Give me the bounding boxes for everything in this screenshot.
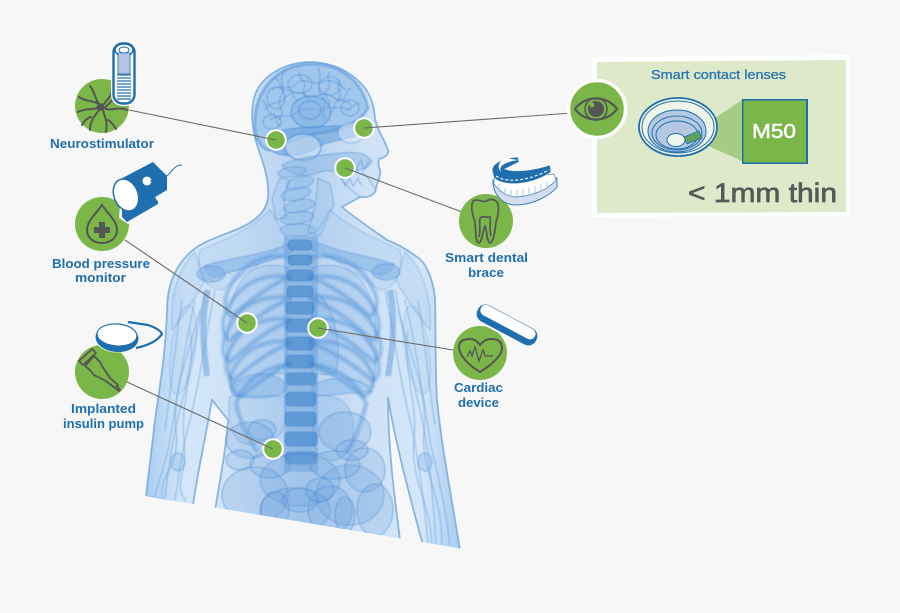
- dental brace illustration: [492, 157, 557, 205]
- device: smart dental brace: [445, 157, 557, 280]
- human body illustration: [146, 62, 460, 550]
- label: Cardiac: [454, 380, 503, 395]
- body silhouette: [146, 62, 460, 550]
- device: cardiac device: [453, 300, 542, 410]
- label: monitor: [75, 270, 126, 285]
- label: [63, 401, 144, 431]
- label: [52, 256, 150, 285]
- internal anatomy: [155, 64, 450, 546]
- panel title: Smart contact lenses: [651, 68, 786, 82]
- device: neurostimulator: [50, 42, 154, 151]
- icon: blood drop: [75, 197, 129, 251]
- icon: heart: [453, 326, 507, 380]
- pin: neurostimulator: [266, 130, 286, 150]
- M50 chip: [742, 99, 808, 164]
- neck spine: [272, 165, 334, 236]
- ribs: [223, 256, 381, 452]
- label: Smart dental: [445, 250, 528, 265]
- collar bones: [197, 242, 400, 282]
- pin: cardiac: [308, 318, 328, 338]
- intestines and pelvis: [222, 412, 393, 536]
- pin: contact lens: [354, 118, 374, 138]
- neurostimulator cylinder: [112, 42, 136, 105]
- contact lens illustration: [639, 98, 717, 156]
- icon: eye: [568, 80, 626, 138]
- label: Blood pressure: [52, 256, 150, 271]
- leader line: neurostimulator: [129, 110, 276, 140]
- device: implanted insulin pump: [63, 322, 162, 431]
- arm bones and veins: [155, 290, 450, 546]
- label: Neurostimulator: [50, 136, 154, 151]
- pin: insulin pump: [263, 439, 283, 459]
- icon: tooth: [459, 194, 513, 248]
- leader line: insulin pump: [127, 382, 273, 449]
- label: Implanted: [71, 401, 136, 416]
- skull and brain: [255, 64, 375, 197]
- label: brace: [468, 265, 504, 280]
- leader line: blood pressure monitor: [125, 240, 247, 323]
- pin: blood pressure: [237, 313, 257, 333]
- pin: dental brace: [335, 158, 355, 178]
- icon: neuron: [75, 79, 129, 133]
- cardiac implant pill: [472, 300, 542, 350]
- magnification cone: [706, 100, 742, 161]
- label: insulin pump: [63, 416, 144, 431]
- M50 chip: M50: [752, 121, 796, 143]
- monitor device: [109, 162, 182, 224]
- lungs and organs: [227, 265, 376, 460]
- leader line: contact lens: [364, 113, 572, 128]
- leader line: dental brace: [345, 168, 462, 212]
- label: [454, 380, 503, 410]
- icon: insulin pump: [75, 345, 129, 399]
- label: [445, 250, 528, 280]
- device: blood pressure monitor: [52, 162, 182, 285]
- panel: smart contact lenses: [592, 55, 850, 217]
- label: device: [458, 395, 499, 410]
- spine: [284, 236, 318, 472]
- trapezius and shoulder layers: [172, 210, 430, 330]
- leader line: cardiac: [318, 328, 453, 350]
- pump device: [95, 322, 162, 353]
- thickness caption: < 1mm thin: [688, 178, 837, 208]
